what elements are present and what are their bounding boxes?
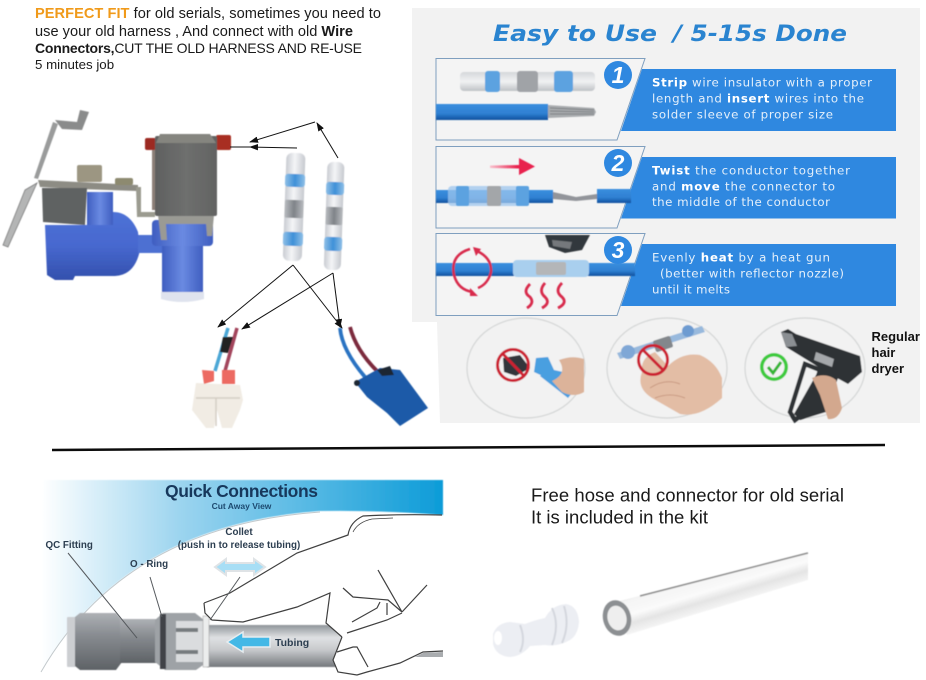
step 1: Strip wire insulator with a proper — [652, 76, 872, 90]
heading: easy to use: / 5-15s Done — [670, 22, 847, 47]
hair dryer note: hair — [872, 345, 895, 360]
arrows from sleeves to valve and harnesses — [218, 122, 342, 329]
step 2: 2 — [611, 150, 625, 176]
hair dryer note: dryer — [872, 361, 904, 376]
callout labels — [46, 527, 309, 649]
hand outline — [204, 515, 443, 680]
diagram: quick connections cut away view: Cut Away View — [212, 501, 272, 511]
photo: white push fitting — [493, 604, 579, 657]
step 1: 1 — [612, 62, 624, 88]
leader lines — [68, 553, 240, 638]
fitting body — [67, 613, 209, 670]
callout labels: Collet — [225, 527, 253, 538]
hair dryer note — [872, 329, 920, 376]
tubing — [207, 625, 342, 667]
icon: pliers prohibited — [467, 318, 585, 418]
photo: white harness connector — [192, 328, 243, 428]
header gradient band — [41, 480, 443, 672]
icon: heat gun approved — [745, 318, 865, 420]
callout labels: (push in to release tubing) — [178, 540, 300, 551]
step 3: until it melts — [652, 282, 730, 296]
hair dryer note: Regular — [872, 329, 920, 344]
step 2: Twist the conductor together — [652, 163, 850, 177]
step 3 — [436, 234, 896, 316]
step 1: length and insert wires into the — [652, 92, 864, 106]
step 1 — [436, 58, 896, 140]
top instruction text — [35, 6, 381, 72]
top instruction text: use your old harness , And connect with old Wire — [35, 24, 353, 40]
step 2: and move the connector to — [652, 179, 835, 193]
solder connector sleeve B — [323, 162, 345, 270]
double arrow: collet — [215, 559, 265, 575]
quick connections heading: Quick Connections — [165, 481, 318, 501]
top instruction text: 5 minutes job — [35, 57, 114, 72]
solder connector sleeve A — [282, 153, 306, 261]
top instruction text: PERFECT FIT for old serials, sometimes you need to — [35, 6, 381, 22]
panel: easy to use instructions — [412, 8, 920, 423]
step 3: Evenly heat by a heat gun — [652, 251, 830, 265]
free hose caption: It is included in the kit — [531, 506, 708, 528]
free hose caption — [531, 484, 844, 528]
photo: blue harness connector — [340, 327, 428, 426]
step 3: (better with reflector nozzle) — [660, 267, 844, 281]
heading: easy to use — [493, 22, 847, 47]
heading: easy to use: Easy to Use — [493, 22, 657, 47]
step 1: solder sleeve of proper size — [652, 107, 833, 121]
diagram: quick connections cut away view — [41, 480, 443, 680]
free hose caption: Free hose and connector for old serial — [531, 484, 844, 506]
callout labels: O - Ring — [130, 559, 168, 570]
callout labels: QC Fitting — [46, 540, 93, 551]
arrow: tubing — [227, 632, 270, 652]
divider line — [52, 445, 885, 450]
photo: clear hose — [599, 553, 808, 639]
photo: water inlet valve — [3, 110, 231, 302]
icon: fingers prohibited — [607, 318, 727, 418]
step 3: 3 — [612, 237, 625, 263]
step 2 — [436, 146, 896, 228]
callout labels: Tubing — [275, 637, 309, 649]
top instruction text: Connectors,CUT THE OLD HARNESS AND RE-USE — [35, 40, 362, 56]
step 2: the middle of the conductor — [652, 195, 830, 209]
